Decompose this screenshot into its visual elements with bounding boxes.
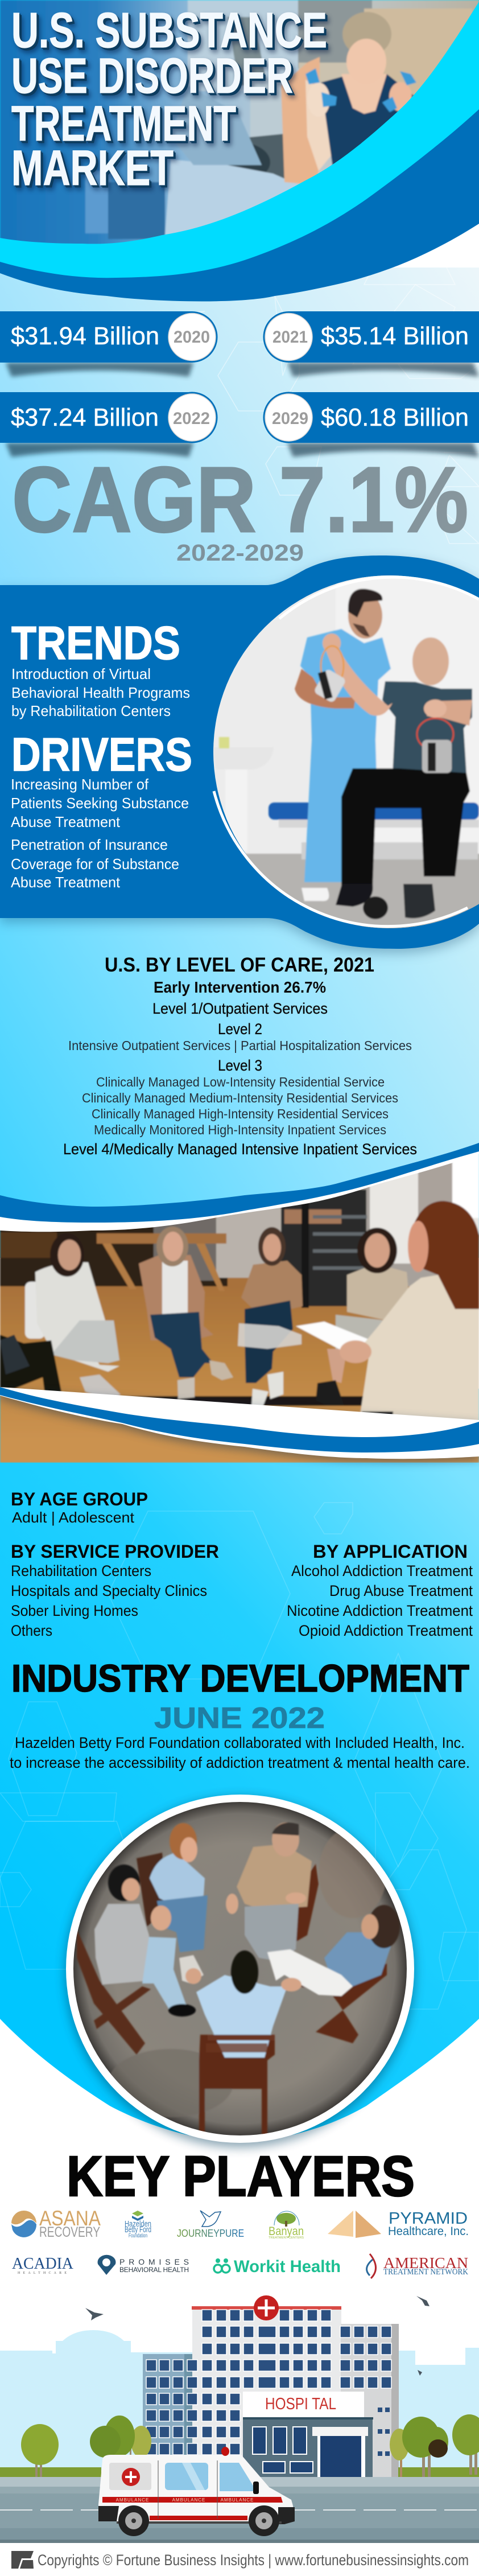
market value 2029: 2029 [272,409,308,428]
market value 2029: $60.18 Billion [321,404,469,431]
logo: Hazelden Betty Ford: Foundation [129,2233,147,2239]
illustration: ambulance [98,2447,295,2536]
logo: Asana Recovery: RECOVERY [39,2224,100,2240]
level of care list [63,978,417,1158]
application list: Nicotine Addiction Treatment [287,1602,473,1619]
photo: physiotherapist and patient [210,569,479,939]
trends list: by Rehabilitation Centers [11,702,171,719]
trends list [11,665,190,719]
ambulance labels: AMBULANCE [116,2497,149,2503]
level of care list: Clinically Managed High-Intensity Residential Services [92,1106,389,1121]
photo bottom blue band [0,1387,479,1452]
market value 2021: $35.14 Billion [321,322,469,350]
hospital sign text: HOSPI TAL [265,2395,336,2413]
illustration: birds [85,2296,430,2376]
market value 2020: 2020 [174,328,210,347]
photo: support group in a room [0,1150,479,1463]
photo top blue band [0,1138,479,1223]
photo bottom white frame [0,1387,479,1459]
title: TREATMENT [11,96,236,151]
logo: Acadia Healthcare: ACADIA [12,2254,73,2273]
application list: Opioid Addiction Treatment [299,1622,473,1639]
hero photo: therapist and woman with dumbbells [0,0,479,250]
logo: Hazelden Betty Ford: Betty Ford [125,2225,151,2235]
market value 2029 [263,392,479,457]
market value 2022: $37.24 Billion [11,404,159,431]
trends heading: TRENDS [11,616,180,669]
age group heading: BY AGE GROUP [11,1489,148,1509]
CAGR period: 2022-2029 [176,540,304,566]
ambulance labels: AMBULANCE [172,2497,205,2503]
title: U.S. SUBSTANCE [11,3,327,58]
title [11,3,327,196]
hero cyan swoop band [0,0,479,278]
level of care list: Intensive Outpatient Services | Partial Hospitalization Services [68,1038,412,1053]
logo: Hazelden Betty Ford [125,2211,151,2239]
illustration: hospital building [143,2295,399,2477]
photo: group therapy circle from above [65,1795,415,2147]
age group list: Adult | Adolescent [12,1509,135,1526]
logo: Banyan: TREATMENT CENTERS [269,2236,304,2240]
logo: Promises Behavioral Health: PROMISES [119,2257,189,2266]
ambulance labels: AMBULANCE [221,2497,254,2503]
icon: Fortune Business Insights logo [11,2551,34,2569]
logo: Promises Behavioral Health [97,2255,189,2275]
logo: American Treatment Network: AMERICAN [383,2254,468,2272]
service provider list: Sober Living Homes [11,1602,138,1619]
application list: Drug Abuse Treatment [329,1582,473,1599]
drivers list: Patients Seeking Substance [11,795,189,812]
illustration: trees [21,2414,479,2477]
title: MARKET [11,141,174,196]
application list [287,1562,473,1639]
key players heading: KEY PLAYERS [67,2145,415,2208]
panel: trends and drivers [0,555,479,949]
trends list: Behavioral Health Programs [11,684,190,701]
illustration: skyline [0,2330,479,2470]
logo: Acadia Healthcare: HEALTHCARE [18,2272,67,2275]
industry development date: JUNE 2022 [154,1702,325,1735]
market value 2022 [0,392,217,457]
drivers list: Increasing Number of [11,776,149,793]
logo: Pyramid Healthcare: Healthcare, Inc. [388,2225,469,2238]
hero blue swoop band [0,0,479,301]
icon: red cross badge [254,2295,279,2320]
level of care list: Clinically Managed Medium-Intensity Residential Services [82,1091,398,1105]
market value 2022: 2022 [173,409,210,428]
trends list: Introduction of Virtual [11,665,151,682]
background: level of care gradient [0,916,479,1258]
logo: Promises Behavioral Health: BEHAVIORAL HEALTH [119,2266,189,2274]
level of care heading: U.S. BY LEVEL OF CARE, 2021 [105,954,374,976]
market value 2021 [263,311,479,377]
logo: JourneyPure: JOURNEYPURE [177,2228,244,2239]
ambulance labels [116,2497,254,2503]
logo: Workit Health: Workit Health [234,2257,341,2276]
drivers list: Abuse Treatment [11,874,121,891]
illustration: grass and road [0,2467,479,2543]
logo: Hazelden Betty Ford: Hazelden [125,2219,151,2229]
background: hexagon pattern lower [0,1503,479,2009]
title: USE DISORDER [11,48,293,104]
logo: Pyramid Healthcare: PYRAMID [389,2209,468,2228]
service provider list: Others [11,1622,52,1639]
logo: Pyramid Healthcare [328,2209,469,2238]
level of care list: Level 2 [218,1020,262,1038]
market value 2021: 2021 [272,328,308,347]
logo: Banyan: Banyan [269,2225,304,2238]
level of care list: Level 4/Medically Managed Intensive Inpatient Services [63,1141,417,1158]
photo top white frame [0,1138,479,1232]
background: hexagon pattern upper [181,228,479,544]
logo: Banyan [269,2211,304,2240]
logo: JourneyPure [177,2211,244,2239]
logo: Asana Recovery: ASANA [39,2207,101,2230]
industry development text [10,1734,470,1771]
application heading: BY APPLICATION [313,1541,468,1562]
logo: Asana Recovery [11,2207,101,2240]
white arc frames [214,577,479,927]
application list: Alcohol Addiction Treatment [291,1562,473,1579]
level of care list: Level 3 [218,1057,262,1074]
drivers list: Penetration of Insurance [11,836,168,853]
market value 2020: $31.94 Billion [11,322,159,350]
market value 2020 [0,311,217,377]
drivers list [11,776,189,891]
level of care list: Level 1/Outpatient Services [152,1000,328,1017]
service provider list [11,1562,207,1639]
drivers list: Abuse Treatment [11,813,121,830]
level of care list: Medically Monitored High-Intensity Inpatient Services [94,1122,386,1137]
service provider list: Rehabilitation Centers [11,1562,151,1579]
logo: American Treatment Network [367,2254,468,2278]
service provider list: Hospitals and Specialty Clinics [11,1582,207,1599]
drivers heading: DRIVERS [11,728,192,781]
background: lower gradient [0,1389,479,2140]
background over top band [0,1138,479,1207]
level of care list: Early Intervention 26.7% [154,978,326,996]
level of care list: Clinically Managed Low-Intensity Residential Service [96,1075,385,1089]
background: upper gradient [0,268,479,592]
service provider heading: BY SERVICE PROVIDER [11,1541,219,1562]
drivers list: Coverage for of Substance [11,855,179,873]
logo: American Treatment Network: TREATMENT NETWORK [383,2268,468,2277]
